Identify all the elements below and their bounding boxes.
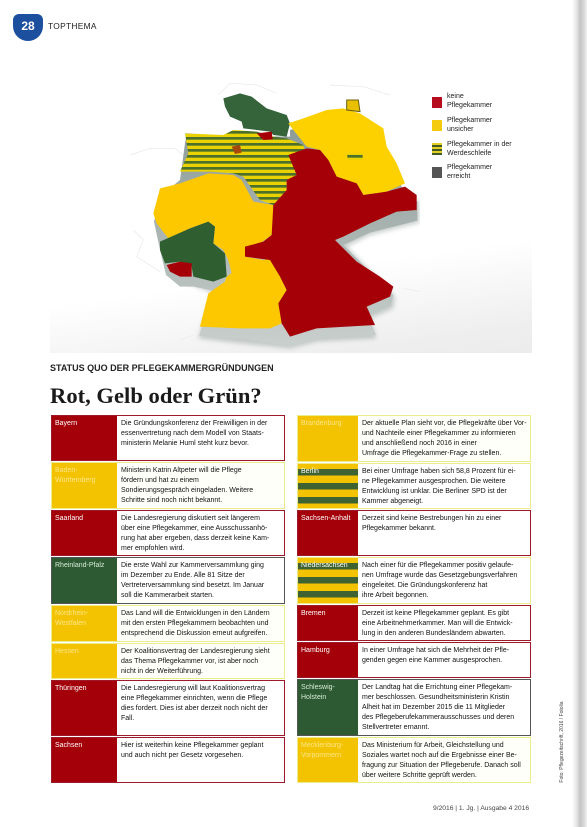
panel: Hamburg: Hamburg [301, 647, 330, 654]
panel: Sachsen-Anhalt [297, 510, 531, 556]
state: Baden-Wuerttemberg yellow [200, 258, 287, 328]
panel: Bremen: Bremen [301, 610, 326, 617]
panel: Brandenburg [297, 415, 531, 462]
panel: Berlin: Kammer abgeneigt. [362, 498, 423, 505]
island: Ruegen [347, 100, 360, 112]
panel: Sachsen: Sachsen [55, 742, 82, 749]
state: Berlin striped [347, 153, 363, 160]
vertical photo credit: Foto: Pflegezeitschrift, 2016 / Fotolia [559, 701, 565, 783]
panel: Nordrhein-Westfalen: Nordrhein- [55, 610, 88, 617]
panel: Hessen: Der Koalitionsvertrag der Landesregierung sieht [121, 648, 270, 655]
legend swatch: red [432, 97, 442, 108]
legend text: yellow [447, 116, 492, 133]
panel: Schleswig-Holstein: mer beschlossen. Gesundheitsministerin Kristin [362, 694, 509, 701]
panel: Hessen: Hessen [55, 648, 79, 655]
panel: Baden-Wuerttemberg: Ministerin Katrin Altpeter will die Pflege [121, 467, 242, 474]
panel: Saarland: Saarland [55, 515, 83, 522]
state: Rheinland-Pfalz green [160, 222, 227, 282]
panel: Thueringen: Thüringen [55, 685, 87, 692]
panel: Sachsen-Anhalt: Derzeit sind keine Bestrebungen hin zu einer [362, 515, 501, 522]
legend text: grey: Pflegekammer [447, 164, 492, 171]
panel: Niedersachsen: nen Umfrage wurde das Gesetzgebungsverfahren [362, 572, 517, 579]
panel: Rheinland-Pfalz [51, 557, 285, 604]
panel: Mecklenburg-Vorpommern: über weitere Schritte geprüft werden. [362, 772, 477, 779]
panel: Bremen [297, 605, 531, 641]
panel: Nordrhein-Westfalen [51, 605, 285, 642]
panel: Brandenburg: und Nachteile einer Pflegekammer zu informieren [362, 430, 516, 437]
panel: Baden-Wuerttemberg: Baden- [55, 467, 78, 474]
panel: Brandenburg: Der aktuelle Plan sieht vor, die Pflegekräfte über Vor- [362, 420, 527, 427]
panel: Schleswig-Holstein: des Pflegeberufekammerausschusses und deren [362, 714, 514, 721]
panel: Thueringen [51, 680, 285, 736]
panel: Niedersachsen: eingeleitet. Die Gründungskonferenz hat [362, 582, 487, 589]
panel: Rheinland-Pfalz: soll die Kammerarbeit starten. [121, 592, 214, 599]
map background [50, 85, 532, 353]
panel: Nordrhein-Westfalen: mit den ersten Pflegekammern beobachten und [121, 620, 268, 627]
legend text: striped: Pflegekammer in der [447, 141, 512, 148]
panel: Baden-Wuerttemberg [51, 462, 285, 509]
panel: Bayern: ministerin Melanie Huml steht kurz bevor. [121, 440, 249, 447]
right page gutter [572, 0, 587, 827]
panel: Schleswig-Holstein: Alheit hat im Dezember 2015 die 11 Mitglieder [362, 704, 505, 711]
panel: Bremen: eine Arbeitnehmerkammer. Man will die Entwick- [362, 620, 513, 627]
panel: Hessen: nicht in der Weiterführung. [121, 668, 203, 675]
panel: Sachsen [51, 737, 285, 783]
panel: Bayern: Die Gründungskonferenz der Freiwilligen in der [121, 420, 267, 427]
panel: Baden-Wuerttemberg: Sondierungsgespräch eingeladen. Weitere [121, 487, 253, 494]
panel: Berlin [297, 463, 531, 509]
panel: Bremen: lung in den anderen Bundesländern abwarten. [362, 630, 506, 637]
legend text: striped [447, 140, 512, 157]
panel: Bayern [51, 415, 285, 461]
panel: Nordrhein-Westfalen: entsprechend die Diskussion erneut aufgreifen. [121, 630, 267, 637]
state: Bremen red [232, 145, 242, 154]
panel: Berlin: Bei einer Umfrage haben sich 58,8 Prozent für ei- [362, 468, 516, 475]
panel: Mecklenburg-Vorpommern: Das Ministerium für Arbeit, Gleichstellung und [362, 742, 504, 749]
page number badge [13, 14, 43, 41]
panel: Sachsen-Anhalt: Pflegekammer bekannt. [362, 525, 436, 532]
panel: Mecklenburg-Vorpommern: fragung zur Situation der Pflegeberufe. Danach soll [362, 762, 521, 769]
panel: Saarland: rung hat aber ergeben, dass derzeit keine Kam- [121, 535, 269, 542]
legend text: grey: erreicht [447, 173, 470, 180]
panel: Rheinland-Pfalz: im Dezember zu Ende. Alle 81 Sitze der [121, 572, 245, 579]
panel: Hessen [51, 643, 285, 679]
panel: Niedersachsen: Nach einer für die Pflegekammer positiv gelaufe- [362, 562, 513, 569]
panel: Niedersachsen: Niedersachsen [301, 562, 348, 569]
legend text: yellow: unsicher [447, 126, 473, 133]
state: Niedersachsen striped [180, 130, 305, 205]
legend swatch: striped [432, 143, 442, 155]
panel: Sachsen: Hier ist weiterhin keine Pflegekammer geplant [121, 742, 263, 749]
panel: Saarland: mer empfohlen wird. [121, 545, 184, 552]
legend text: red: keine [447, 93, 464, 100]
panel: Thueringen: Fall. [121, 715, 134, 722]
panel: Saarland: Die Landesregierung diskutiert seit längerem [121, 515, 260, 522]
legend text: yellow: Pflegekammer [447, 117, 492, 124]
panel: Brandenburg: Umfrage die Pflegekammer-Frage zu stellen. [362, 450, 501, 457]
panel: Bremen: Derzeit ist keine Pflegekammer geplant. Es gibt [362, 610, 509, 617]
panel: Hamburg: genden gegen eine Kammer ausgesprochen. [362, 657, 502, 664]
panel: Hamburg [297, 642, 531, 678]
panel: Schleswig-Holstein: Stellvertreter ernannt. [362, 724, 429, 731]
map soft shadow [180, 200, 419, 348]
panel: Baden-Wuerttemberg: Schritte sind noch nicht bekannt. [121, 497, 222, 504]
panel: Brandenburg: Brandenburg [301, 420, 341, 427]
panel: Bayern: essenvertretung nach dem Modell von Staats- [121, 430, 264, 437]
panel: Berlin: Entwicklung ist unklar. Die Berliner SPD ist der [362, 488, 507, 495]
state: Hamburg red [257, 132, 273, 140]
state: Saarland red [167, 262, 192, 277]
title: Rot, Gelb oder Grün? [50, 383, 262, 408]
panel: Hamburg: In einer Umfrage hat sich die Mehrheit der Pfle- [362, 647, 509, 654]
panel: Baden-Wuerttemberg: fördern und hat zu einem [121, 477, 199, 484]
legend text: red: Pflegekammer [447, 102, 492, 109]
panel: Brandenburg: und anschließend noch 2016 in einer [362, 440, 477, 447]
state: Nordrhein-Westfalen and Hessen yellow [153, 173, 273, 273]
panel: Schleswig-Holstein [297, 679, 531, 736]
state: Brandenburg and Mecklenburg yellow [288, 108, 405, 195]
legend text: red [447, 92, 492, 109]
legend text: grey [447, 164, 492, 180]
panel: Saarland: über eine Pflegekammer, eine Ausschussanhö- [121, 525, 267, 532]
panel: Niedersachsen [297, 557, 531, 604]
panel: Nordrhein-Westfalen: Westfalen [55, 620, 86, 627]
state: Schleswig-Holstein green [223, 93, 290, 137]
panel: Mecklenburg-Vorpommern: Soziales wartet noch auf die Ergebnisse einer Be- [362, 752, 517, 759]
panel: Bayern: Bayern [55, 420, 77, 427]
panel: Berlin: ne Pflegekammer ausgesprochen. Die weitere [362, 478, 506, 485]
legend swatch: yellow [432, 120, 442, 131]
section label: TOPTHEMA [48, 21, 97, 31]
legend swatch: grey [432, 167, 442, 178]
map extrusion side [154, 120, 417, 346]
panel: Baden-Wuerttemberg: Württemberg [55, 477, 95, 484]
page number badge: 28 [21, 19, 35, 33]
panel: Nordrhein-Westfalen: Das Land will die Entwicklungen in den Ländern [121, 610, 270, 617]
states: east and south red [245, 148, 417, 337]
panel: Thueringen: Die Landesregierung will laut Koalitionsvertrag [121, 685, 265, 692]
panel: Sachsen: und auch nicht per Gesetz vorgesehen. [121, 752, 243, 759]
kicker heading: STATUS QUO DER PFLEGEKAMMERGRÜNDUNGEN [50, 363, 274, 373]
panel: Mecklenburg-Vorpommern [297, 737, 531, 783]
panel: Schleswig-Holstein: Holstein [301, 694, 326, 701]
footer issue line: 9/2016 | 1. Jg. | Ausgabe 4 2016 [433, 805, 529, 812]
panel: Rheinland-Pfalz: Die erste Wahl zur Kammerversammlung ging [121, 562, 264, 569]
panel: Saarland [51, 510, 285, 556]
panel: Berlin: Berlin [301, 468, 319, 475]
legend [432, 92, 512, 180]
map of Germany [130, 83, 420, 350]
panel: Thueringen: eine Pflegekammer einrichten, wenn die Pflege [121, 695, 267, 702]
panel: Sachsen-Anhalt: Sachsen-Anhalt [301, 515, 350, 522]
panel: Niedersachsen: ihre Arbeit begonnen. [362, 592, 429, 599]
panel: Thueringen: dies fordert. Dies ist aber derzeit noch nicht der [121, 705, 268, 712]
panel: Rheinland-Pfalz: Rheinland-Pfalz [55, 562, 104, 569]
panel: Rheinland-Pfalz: Vertreterversammlung sind besetzt. Im Januar [121, 582, 264, 589]
panel: Schleswig-Holstein: Schleswig- [301, 684, 335, 691]
legend text: striped: Werdeschleife [447, 150, 491, 157]
panel: Schleswig-Holstein: Der Landtag hat die Errichtung einer Pflegekam- [362, 684, 512, 691]
panel: Mecklenburg-Vorpommern: Vorpommern [301, 752, 341, 759]
panel: Hessen: das Thema Pflegekammer vor, ist aber noch [121, 658, 258, 665]
panel: Mecklenburg-Vorpommern: Mecklenburg- [301, 742, 343, 749]
